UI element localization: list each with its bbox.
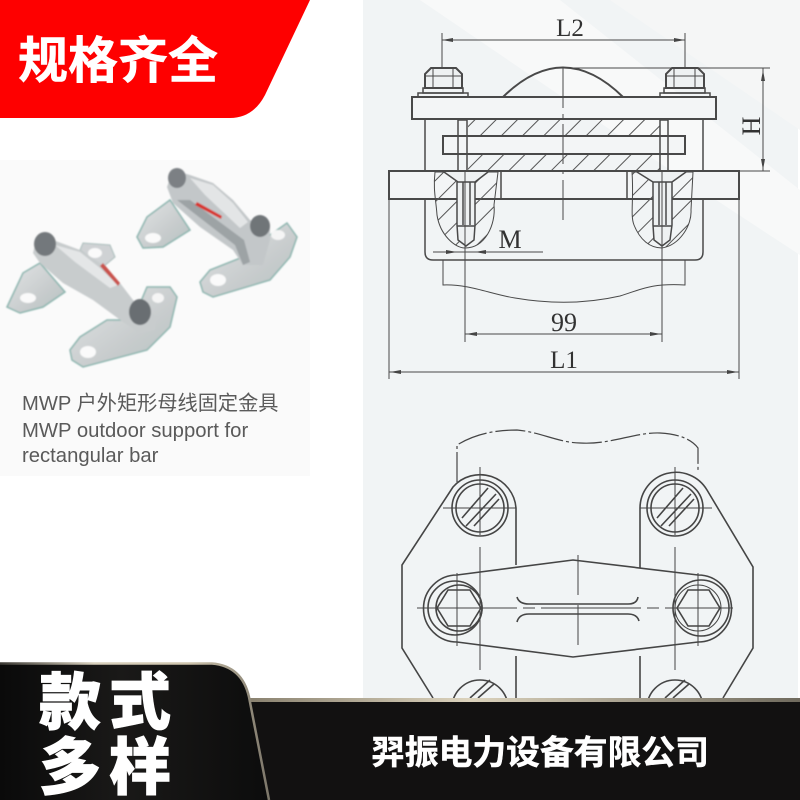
center plate [423, 560, 732, 657]
banner: company bar [240, 698, 800, 800]
icon: right nut [660, 68, 710, 97]
outer plate [402, 472, 753, 700]
section view drawing [389, 15, 770, 379]
99 dimension [465, 172, 662, 342]
caption [22, 392, 278, 467]
99 dimension: 99 [551, 308, 577, 337]
H dimension: H [737, 116, 766, 135]
icon: screw bottom right [647, 680, 703, 736]
icon: back clamp fitting [137, 168, 297, 297]
left screw [444, 172, 488, 246]
icon: left nut [418, 68, 468, 97]
icon: hex bolt right [673, 580, 729, 636]
icon: front clamp fitting [7, 232, 177, 367]
right hatched lobe [632, 172, 693, 248]
title: 规格齐全 [18, 21, 218, 93]
plan view drawing [402, 430, 753, 736]
style heading: 式 [109, 669, 171, 738]
slot lines [517, 597, 639, 622]
caption: MWP 户外矩形母线固定金具 [22, 392, 278, 415]
L1 dimension [389, 199, 739, 379]
icon: screw top left [452, 480, 508, 536]
L2 dimension: L2 [556, 15, 584, 42]
clamp body [389, 68, 739, 302]
style heading [39, 669, 171, 800]
hatched bars [468, 120, 660, 171]
center lines [417, 467, 733, 670]
caption: rectangular bar [22, 445, 159, 467]
M dimension [433, 225, 543, 254]
caption: MWP outdoor support for [22, 420, 248, 442]
style heading: 款 [39, 669, 101, 738]
icon: hex bolt left [428, 581, 482, 635]
M dimension: M [498, 225, 522, 254]
dash-dot break line [457, 430, 698, 482]
panel: black style tab [0, 663, 269, 800]
H dimension [563, 68, 770, 171]
bolts [458, 120, 668, 171]
L1 dimension: L1 [550, 347, 578, 374]
icon: screw bottom left [452, 680, 508, 736]
icon: screw top right [647, 480, 703, 536]
company name: 羿振电力设备有限公司 [371, 725, 709, 774]
drawing background panel [363, 0, 800, 700]
right screw [637, 172, 686, 246]
left hatched lobe [434, 172, 498, 248]
L2 dimension [442, 15, 685, 68]
center line [562, 68, 564, 226]
panel: product photo [0, 160, 310, 476]
banner: red title tab [0, 0, 310, 118]
